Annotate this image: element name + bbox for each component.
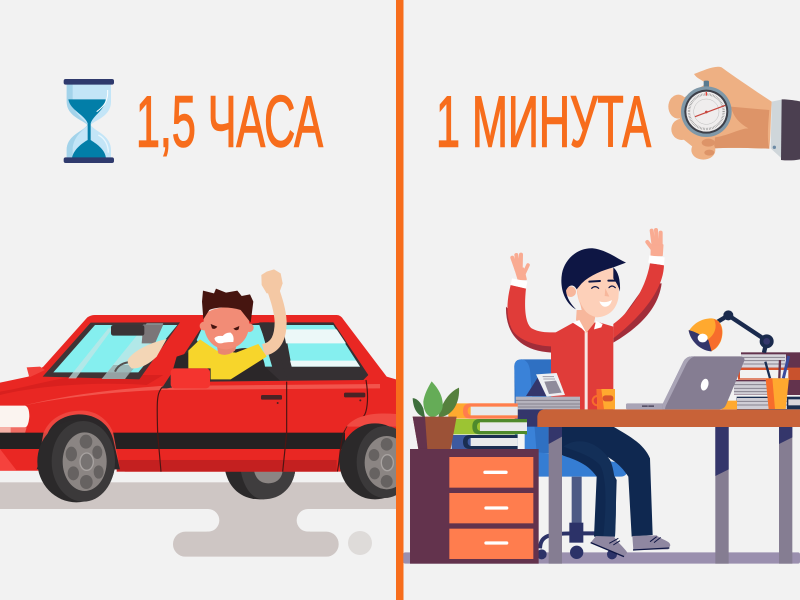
side mirror: [171, 368, 210, 388]
stacked folders: [722, 352, 800, 409]
coffee mug: [593, 389, 615, 409]
hair: [202, 289, 253, 323]
icon: hourglass: [64, 79, 114, 163]
stack of books: [448, 403, 527, 449]
torso: [551, 323, 613, 410]
collar: [573, 320, 603, 333]
man: [506, 230, 670, 557]
heading: 1 minute: 1 МИНУТА: [436, 82, 651, 162]
ears: [200, 322, 204, 330]
icon: hand holding stopwatch: [668, 67, 800, 160]
drawers: [449, 457, 533, 559]
desk: [537, 409, 800, 564]
shirt: [188, 339, 267, 379]
windshield: [43, 322, 180, 379]
rear wheel: [339, 414, 396, 500]
front wheel: [37, 411, 120, 502]
smile: [599, 300, 612, 307]
hand: [680, 67, 772, 150]
arm shadows: [506, 307, 557, 353]
calculator and paper stack: [516, 373, 580, 427]
desk lamp: [689, 310, 774, 353]
floor: [403, 552, 800, 564]
hair: [561, 248, 626, 309]
arms: [507, 285, 567, 347]
bumper and headlight: [0, 406, 38, 471]
left cuff: [511, 278, 527, 289]
divider line: [396, 0, 404, 600]
face: [577, 268, 619, 317]
right hand: [647, 230, 663, 255]
fingers: [668, 95, 688, 119]
eyebrows and eyes: [589, 281, 617, 288]
eyes and mouth: [211, 324, 239, 330]
shirt placket: [585, 332, 588, 410]
stopwatch: [704, 81, 709, 87]
neck: [576, 310, 597, 333]
drawer handles: [483, 471, 508, 545]
arm and fist: [263, 288, 281, 350]
left hand: [512, 255, 528, 279]
illustration: happy man at desk: [403, 230, 800, 564]
car body: [0, 315, 396, 472]
side stripe: [0, 433, 345, 449]
far wheel: [225, 470, 295, 499]
road: [0, 482, 410, 557]
pencil cup: [765, 356, 789, 409]
neck: [217, 346, 236, 355]
chair: [514, 359, 627, 559]
driver: [170, 269, 283, 381]
illustration: angry driver in red car: [0, 269, 413, 557]
right cuff: [648, 255, 665, 265]
drawer cabinet: [410, 449, 539, 564]
door seams: [157, 380, 368, 472]
shoes: [591, 536, 627, 557]
head: [204, 307, 249, 349]
potted plant: [413, 381, 459, 449]
sleeve: [771, 99, 783, 159]
laptop: [626, 356, 744, 409]
door handles: [261, 393, 365, 404]
seat: [230, 348, 280, 381]
heading: 1,5 hours: 1,5 ЧАСА: [136, 82, 323, 162]
trousers: [562, 427, 653, 537]
side window: [162, 322, 368, 388]
